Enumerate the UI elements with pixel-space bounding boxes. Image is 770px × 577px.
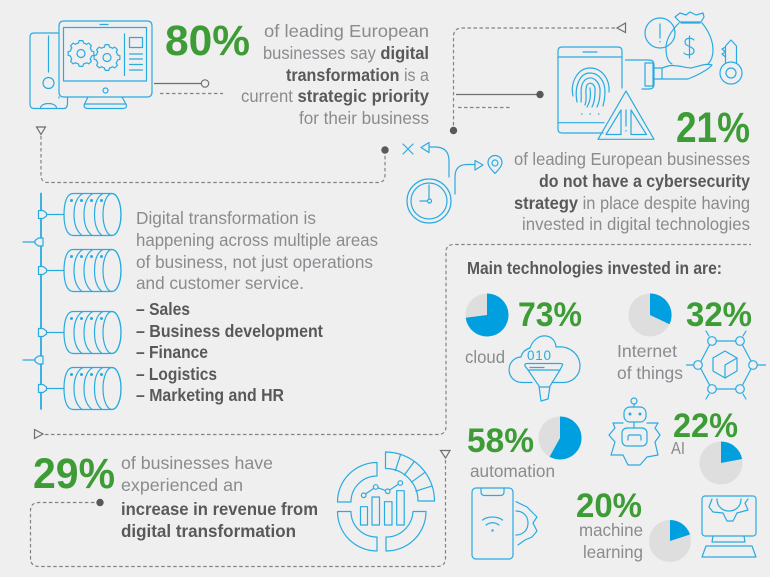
- icon: internet of things hexagon: [686, 331, 766, 399]
- text: 21% description: invested in digital technologies: [522, 214, 750, 234]
- icon: computer with gears: [30, 21, 152, 108]
- text: digital transformation across business areas: Digital transformation is: [136, 208, 316, 228]
- pie chart: AI 22%: [700, 442, 742, 484]
- icon: revenue dial with bar chart: [338, 452, 434, 551]
- list: business areas: – Business development: [136, 321, 323, 341]
- text: 80% description: businesses say digital: [263, 43, 432, 63]
- text: 21% description: strategy in place despite having: [514, 193, 761, 213]
- list: business areas: – Marketing and HR: [136, 385, 284, 405]
- stat: 20%: 20%: [576, 487, 642, 525]
- text: 29% description: of businesses have: [121, 453, 273, 473]
- arrow: dashed frame around revenue section: [30, 450, 450, 566]
- label: machine learning: learning: [583, 542, 643, 562]
- label: machine learning: machine: [579, 520, 643, 540]
- list: business areas: – Sales: [136, 299, 190, 319]
- icon: clock with arrows: [403, 142, 502, 223]
- stat: 22%: 22%: [673, 407, 738, 445]
- arrow: dashed connector to security icon: [450, 23, 626, 134]
- text: 80% description: current strategic priority: [241, 86, 436, 106]
- list: business areas: – Finance: [136, 342, 208, 362]
- text: digital transformation across business areas: happening across multiple areas: [136, 230, 378, 250]
- pie chart: internet of things 32%: [628, 293, 672, 336]
- stat: 32%: 32%: [686, 296, 752, 334]
- connector: 80% callout line: [154, 80, 223, 94]
- label: cloud: cloud: [465, 347, 505, 367]
- icon: cybersecurity tablet, hand, money bag, key, warning: [558, 12, 742, 139]
- icon: machine learning computer: [702, 496, 756, 557]
- label: automation: automation: [470, 461, 555, 481]
- icon: database servers with bus line: [23, 194, 121, 410]
- fingerprint: [572, 68, 609, 107]
- pie chart: cloud 73%: [466, 294, 509, 336]
- text: digital transformation across business areas: and customer service.: [136, 273, 304, 293]
- connector: security callout line: [456, 91, 544, 108]
- text: digital transformation across business areas: of business, not just operations: [136, 252, 373, 272]
- icon: phone with wifi and gear: [472, 488, 537, 559]
- label: internet of things: of things: [617, 363, 683, 383]
- pie chart: machine learning 20%: [649, 520, 691, 562]
- heading: main technologies: Main technologies invested in are:: [467, 258, 722, 278]
- label: AI: AI: [671, 438, 685, 458]
- text: 29% description: experienced an: [121, 475, 243, 495]
- icon: cloud with funnel: 010: [527, 348, 551, 363]
- text: 80% description: of leading European: [264, 21, 429, 41]
- stat: 58%: 58%: [467, 422, 534, 460]
- arrow: dashed frame to technologies section: [34, 244, 751, 438]
- text: 21% description: do not have a cybersecurity: [539, 171, 750, 191]
- pie chart: automation 58%: [538, 416, 582, 460]
- stat: 73%: 73%: [518, 296, 582, 334]
- text: 29% description: digital transformation: [121, 521, 296, 541]
- stat: 80%: 80%: [165, 17, 250, 65]
- list: business areas: – Logistics: [136, 364, 217, 384]
- stat: 29%: 29%: [33, 450, 115, 498]
- label: internet of things: Internet: [617, 341, 677, 361]
- text: 80% description: transformation is a: [286, 65, 432, 85]
- stat: 21%: 21%: [676, 104, 750, 152]
- text: 21% description: of leading European businesses: [514, 149, 750, 169]
- text: 80% description: for their business: [299, 108, 429, 128]
- text: 29% description: increase in revenue from: [121, 499, 318, 519]
- arrow: dashed connector to database section: [36, 127, 389, 182]
- icon: cloud with funnel: [509, 336, 580, 401]
- icon: robot in gear: [609, 398, 660, 465]
